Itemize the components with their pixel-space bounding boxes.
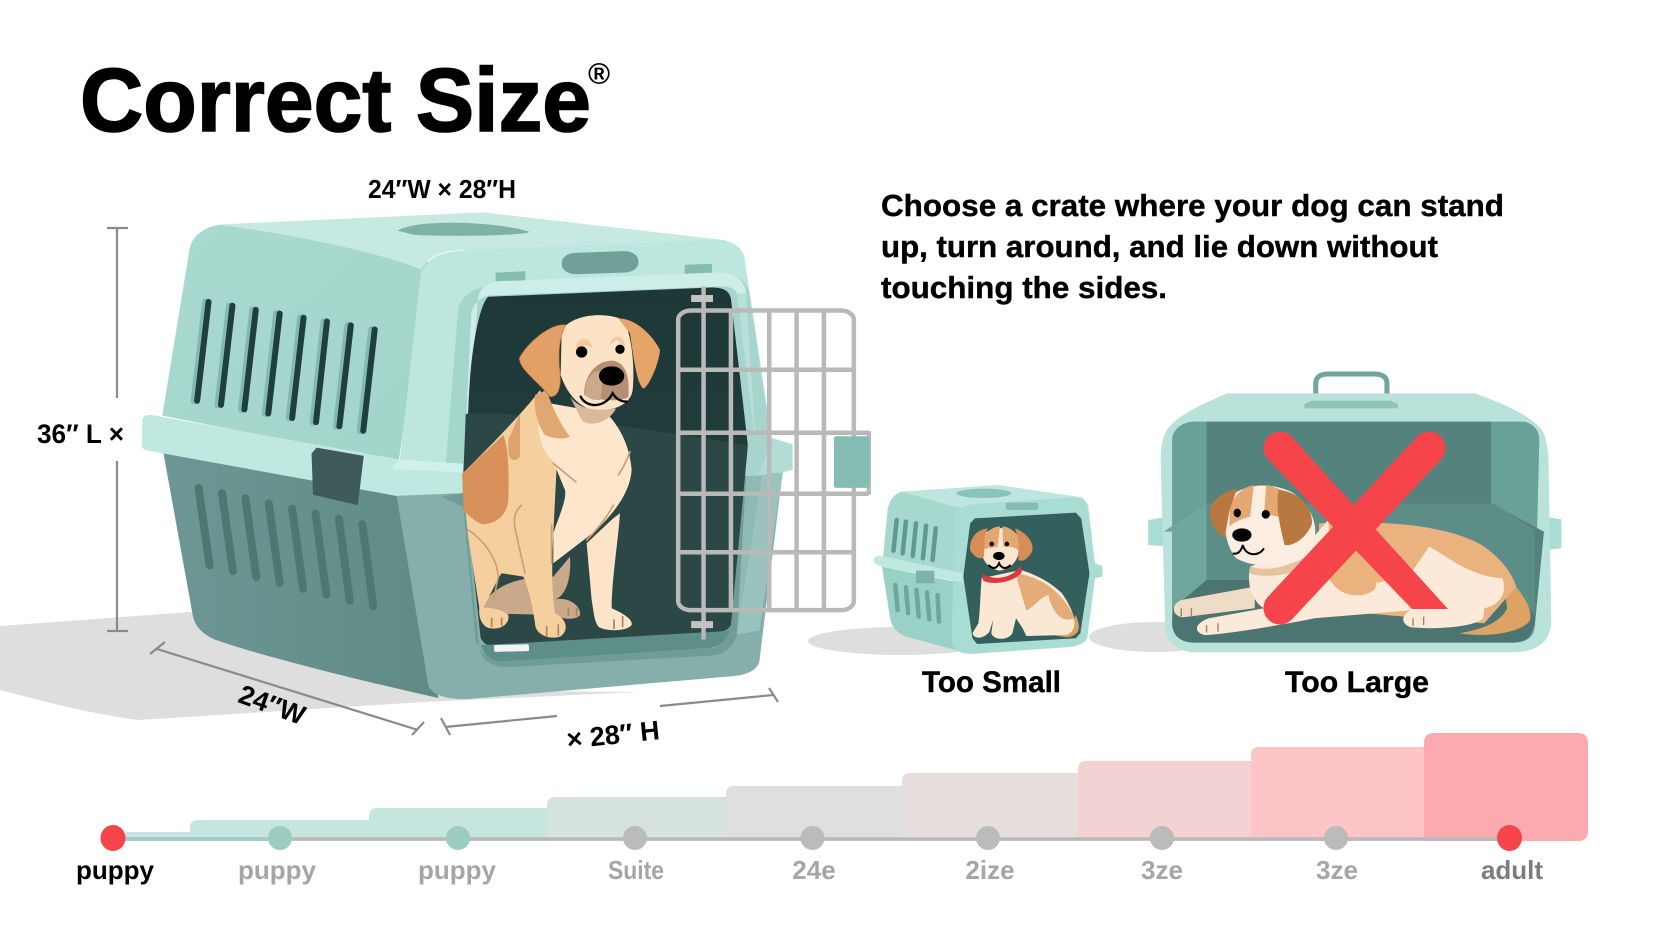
crate opening [463, 287, 748, 645]
crate lower shell front [396, 472, 783, 699]
large crate shell [1161, 393, 1551, 652]
crate lower shell side [162, 447, 438, 698]
crate back wall floor [463, 413, 748, 645]
large dog cream rear [1319, 547, 1504, 628]
crate lid top [220, 212, 739, 269]
depth label: × 28″ H [565, 715, 661, 755]
small lower side [882, 567, 968, 653]
door hinges [691, 298, 713, 625]
small dog tan patch [1016, 573, 1075, 620]
top vent [398, 223, 530, 236]
growth timeline [76, 733, 1588, 885]
door recess [443, 274, 772, 493]
small opening [963, 513, 1090, 644]
lower vent slots [199, 488, 373, 606]
large handle base [1304, 401, 1398, 408]
small dog mouth [989, 563, 1011, 568]
growth steps [125, 733, 1588, 841]
dog left ear [519, 325, 566, 397]
large crate handle [1316, 374, 1387, 398]
large dog tail [1459, 573, 1530, 635]
depth dimension arrow [441, 688, 778, 735]
floor shadow: main crate [0, 612, 640, 720]
small dog collar [982, 565, 1022, 583]
dog back stripe [508, 413, 520, 460]
crate front frame [396, 240, 793, 493]
timeline labels: 24e [792, 855, 836, 885]
dog neck stripe [535, 390, 570, 438]
width label: 24″W [235, 679, 310, 731]
height label: 36″ L × [37, 419, 124, 449]
timeline labels: puppy [418, 855, 497, 885]
large crate floor [1172, 580, 1535, 643]
small dog tail [1053, 615, 1079, 637]
dog toes [492, 608, 623, 637]
large dog face patches [1229, 485, 1298, 527]
large dog tan back [1319, 522, 1516, 623]
mid band [142, 415, 463, 496]
small crate top [897, 485, 1090, 515]
large crate interior [1172, 422, 1539, 643]
large dog rear paw lines [1181, 608, 1424, 633]
dog muzzle [584, 361, 629, 400]
large dog nose [1232, 528, 1252, 542]
timeline axis [113, 837, 1510, 841]
door bars [678, 286, 869, 639]
guidance text: touching the sides. [881, 270, 1167, 305]
dog eyes [576, 346, 587, 358]
small crate shadow [808, 627, 992, 655]
small dog ears [970, 528, 1033, 561]
small dog head [980, 528, 1019, 571]
too small label: Too Small [922, 666, 1061, 699]
timeline labels: 2ize [965, 855, 1015, 885]
dog far leg [587, 513, 632, 630]
latch tabs [496, 264, 712, 281]
wire door [678, 286, 870, 639]
small front frame [952, 497, 1102, 654]
guidance text: Choose a crate where your dog can stand [881, 188, 1504, 223]
timeline labels: Suite [608, 855, 664, 885]
door outer frame [678, 311, 854, 610]
white tag [494, 644, 529, 652]
crate floor lip [481, 631, 729, 661]
handle [561, 251, 639, 275]
door rim [463, 273, 756, 479]
upper vent slot shadows [194, 302, 372, 431]
dog body [462, 390, 566, 638]
small top vent [956, 489, 1011, 498]
dog body lines [468, 452, 630, 600]
small lower slots [895, 585, 939, 622]
side latch [312, 448, 364, 505]
small dog body [972, 570, 1074, 639]
small band [874, 556, 963, 583]
large dog head [1224, 486, 1315, 566]
upper vent slots [197, 302, 375, 431]
timeline teal start [113, 837, 280, 841]
large dog far paw [1174, 587, 1255, 617]
large dog mouth [1233, 545, 1264, 554]
top dimension label: 24″W × 28″H [368, 174, 516, 204]
dog mouth [581, 393, 627, 405]
large dog belly patch [1328, 560, 1376, 595]
small lid side [883, 492, 970, 573]
title: ® [588, 58, 610, 91]
small lid slots [894, 520, 936, 560]
large dog collar [1249, 547, 1321, 576]
large dog chest and near leg [1197, 520, 1415, 635]
timeline labels: 3ze [1316, 855, 1358, 885]
large side tabs [1148, 517, 1561, 550]
lower frame [441, 476, 762, 667]
dog chest [538, 403, 632, 563]
large left wall lines [1164, 503, 1207, 623]
timeline labels [76, 855, 1543, 885]
too large label: Too Large [1285, 666, 1429, 699]
dog nose [599, 366, 624, 386]
guidance text [881, 188, 1504, 305]
dog: sitting in crate [462, 315, 660, 638]
timeline labels: 3ze [1141, 855, 1183, 885]
red x mark [1264, 432, 1448, 609]
small dog face patches [982, 527, 1018, 550]
timeline labels: puppy [238, 855, 317, 885]
small latch [916, 571, 934, 583]
height dimension arrow [107, 228, 128, 631]
width dimension arrow [150, 642, 424, 735]
guidance text: up, turn around, and lie down without [881, 229, 1438, 264]
large lower wall [1207, 503, 1535, 613]
crate lid side [162, 224, 428, 462]
dog muzzle light [585, 371, 602, 400]
timeline labels: puppy [76, 855, 155, 885]
large dog eyes [1234, 509, 1241, 517]
dog brown back patch [462, 435, 509, 524]
small dog eyes and nose [989, 542, 1009, 560]
dog head [561, 315, 633, 411]
dog hind shade [480, 557, 580, 619]
too small crate [808, 485, 1102, 655]
door handle [834, 436, 870, 488]
dog brows [576, 336, 625, 348]
large crate shadow [1089, 622, 1221, 652]
large crate back wall [1207, 422, 1544, 627]
crate side seen through door [731, 293, 793, 634]
title: Correct Size [80, 51, 591, 151]
dog right ear [618, 318, 660, 389]
main crate with dog [142, 212, 870, 699]
mid band highlight [391, 459, 463, 472]
timeline dots [100, 825, 1522, 851]
timeline labels: adult [1481, 855, 1543, 885]
small handle [1006, 503, 1038, 510]
too large crate [1089, 374, 1561, 652]
large dog ears [1210, 488, 1312, 545]
dog chin shade [570, 397, 616, 424]
